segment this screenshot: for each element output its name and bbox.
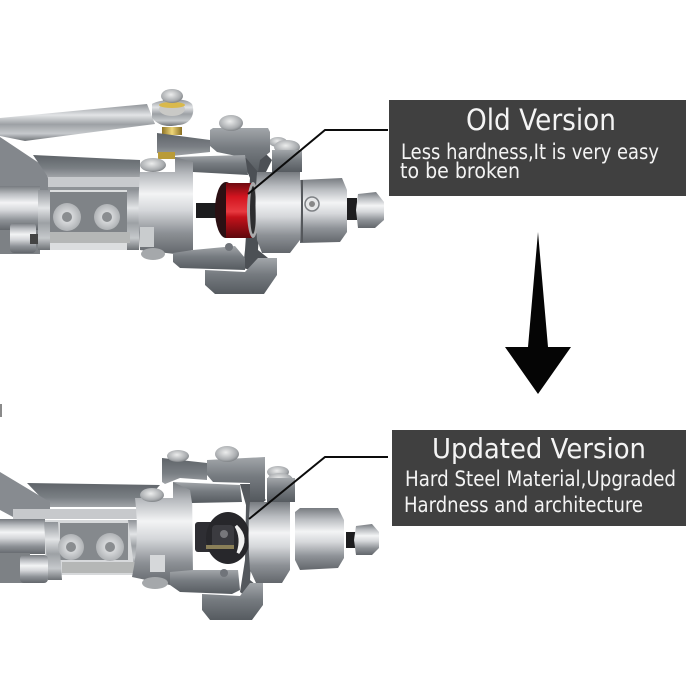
upper bracket screw — [219, 115, 243, 131]
arrow: old to updated — [505, 232, 571, 394]
callout: old version — [389, 100, 686, 196]
ball joint with brass stem — [152, 89, 193, 135]
upper bracket — [207, 457, 265, 500]
left gusset plate — [0, 137, 48, 190]
socket screw right — [94, 204, 120, 230]
upper rail — [13, 509, 140, 519]
lower steering arm — [173, 243, 245, 270]
leader line: updated version — [249, 457, 388, 519]
description: old version — [400, 140, 659, 183]
dark chassis plate — [27, 483, 160, 507]
lower block — [202, 583, 263, 620]
end lock nut — [356, 192, 384, 228]
lower block — [205, 258, 277, 294]
threaded stud — [346, 532, 356, 548]
upper bracket screw — [215, 446, 239, 462]
threaded rod — [62, 562, 137, 573]
black shaft — [196, 203, 220, 218]
dark chassis plate — [33, 155, 140, 177]
curved upper yoke — [175, 155, 248, 175]
small edge artifact — [0, 404, 2, 417]
description: updated version: Hardness and architecture — [404, 493, 643, 517]
steering knuckle left body — [138, 157, 193, 260]
main tube — [0, 186, 40, 230]
curved upper yoke — [173, 482, 242, 503]
left lock nut — [20, 555, 48, 583]
left lock nut — [10, 223, 38, 253]
description: updated version — [404, 467, 676, 517]
end lock nut — [354, 524, 379, 555]
universal joint — [195, 512, 250, 564]
main tube — [0, 519, 45, 554]
upper bracket — [210, 128, 270, 172]
rear block and screws — [269, 137, 302, 172]
dark rear plate — [240, 484, 266, 600]
steering knuckle left body — [132, 482, 193, 589]
description: old version: Less hardness,It is very easy — [401, 140, 659, 164]
socket screw left — [53, 203, 81, 231]
callout: updated version — [392, 430, 686, 526]
heading: updated version: Updated Version — [432, 432, 646, 465]
red coupler — [215, 182, 259, 238]
product photo: old version steering assembly — [0, 89, 384, 294]
tie rod — [0, 104, 155, 141]
socket screw right — [96, 533, 124, 561]
upper steering arm — [157, 133, 210, 156]
upper steering arm — [162, 458, 207, 484]
upper rail — [48, 177, 143, 187]
hex nut with set screw — [300, 178, 347, 243]
lower steering arm — [170, 569, 240, 594]
description: old version: to be broken — [400, 159, 520, 183]
threaded rod — [50, 232, 130, 243]
rear block and screws — [267, 466, 295, 502]
right collar — [248, 502, 290, 583]
mounting plate — [44, 520, 145, 580]
threaded stud — [347, 198, 357, 220]
product photo: updated version steering assembly — [0, 446, 379, 620]
right collar — [256, 172, 300, 253]
upper arm screw — [167, 450, 189, 462]
heading: old version: Old Version — [466, 103, 616, 137]
dark rear plate — [240, 150, 272, 272]
socket screw left — [58, 534, 84, 560]
leader line: old version — [248, 130, 388, 194]
hex nut — [295, 508, 344, 570]
left gusset plate — [0, 472, 50, 517]
mounting plate — [38, 190, 139, 250]
